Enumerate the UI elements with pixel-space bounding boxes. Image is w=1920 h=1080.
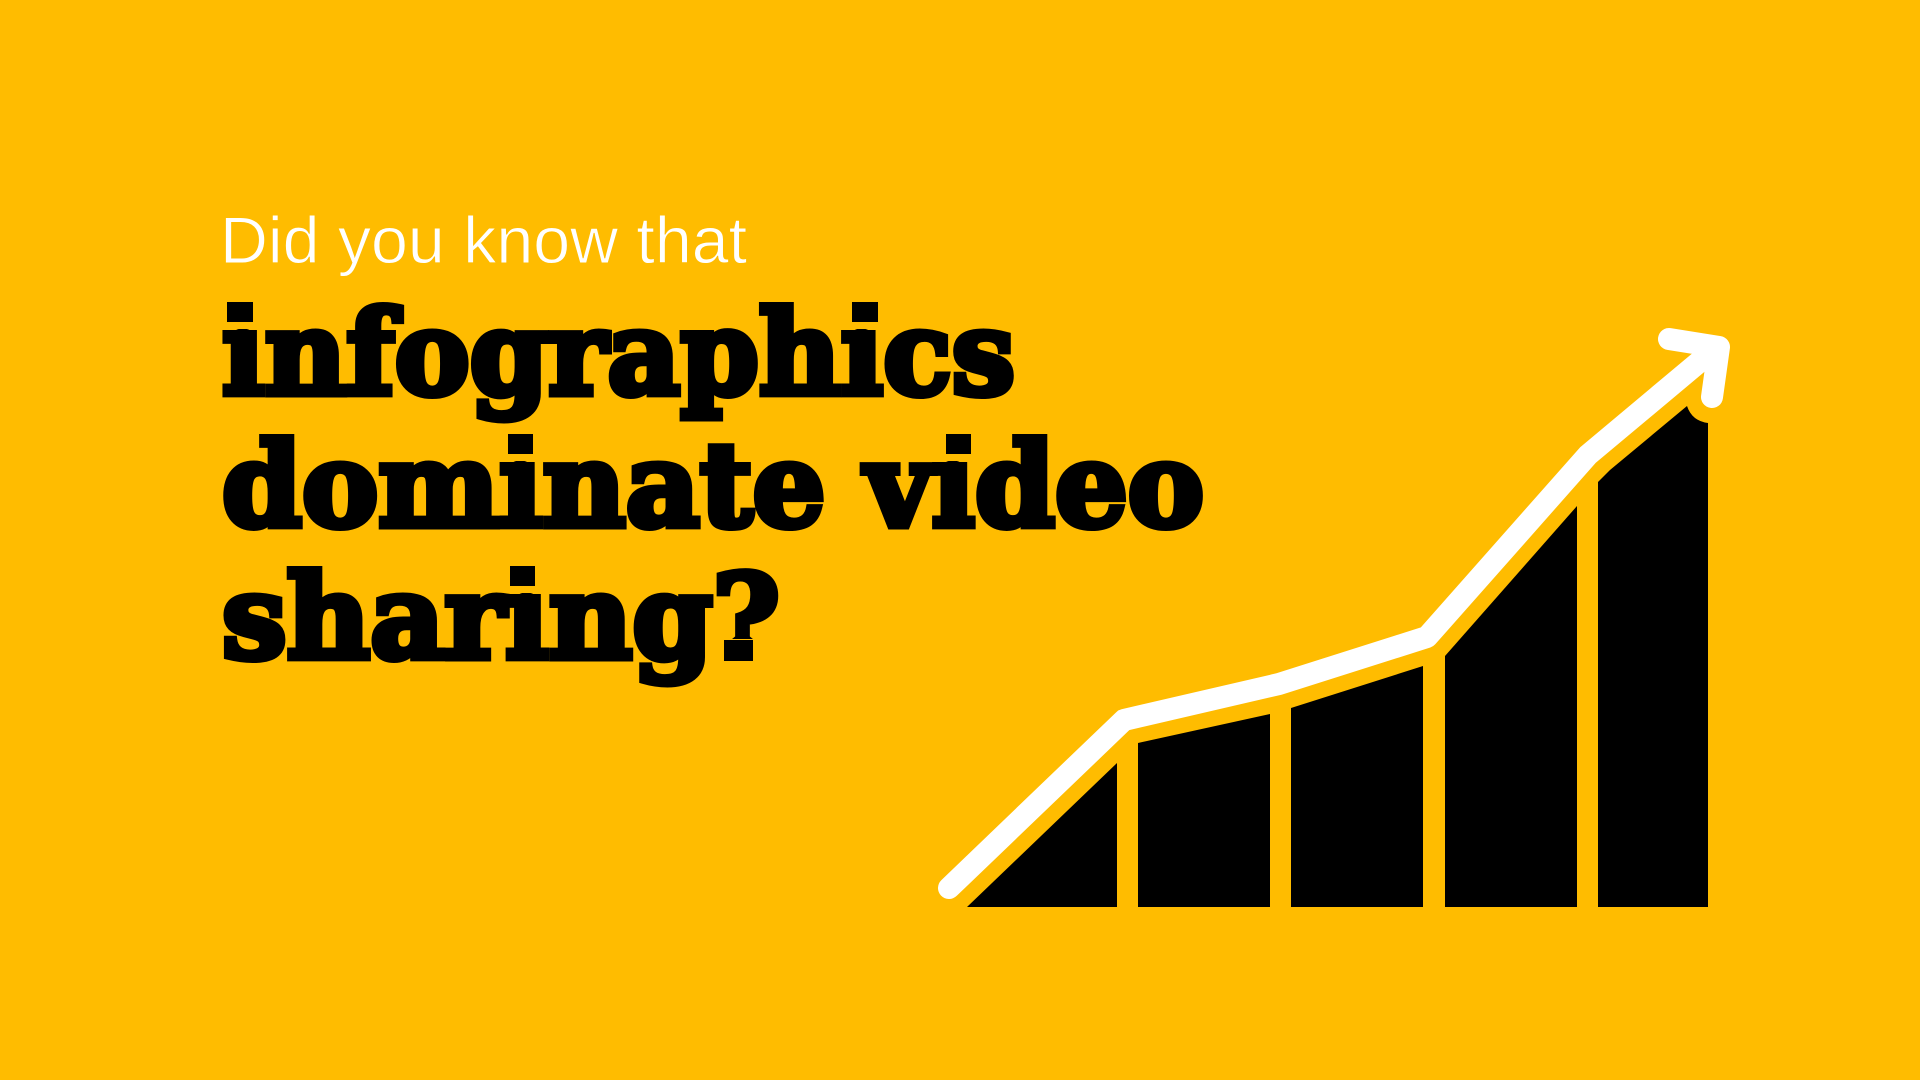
growth chart: [949, 339, 1719, 907]
bar 1: [967, 763, 1117, 907]
bar 4: [1445, 506, 1577, 907]
square letter dots: [224, 298, 973, 669]
intro line: Did you know that: [220, 203, 747, 277]
bar 3: [1291, 666, 1423, 907]
rising arrow: [949, 339, 1719, 888]
heading: [222, 286, 1204, 686]
heading line 3: sharing?: [222, 550, 780, 686]
heading line 1: infographics: [222, 286, 1015, 422]
bar 2: [1138, 714, 1270, 907]
bar 5: [1598, 406, 1708, 907]
heading line 2: dominate video: [222, 418, 1204, 554]
